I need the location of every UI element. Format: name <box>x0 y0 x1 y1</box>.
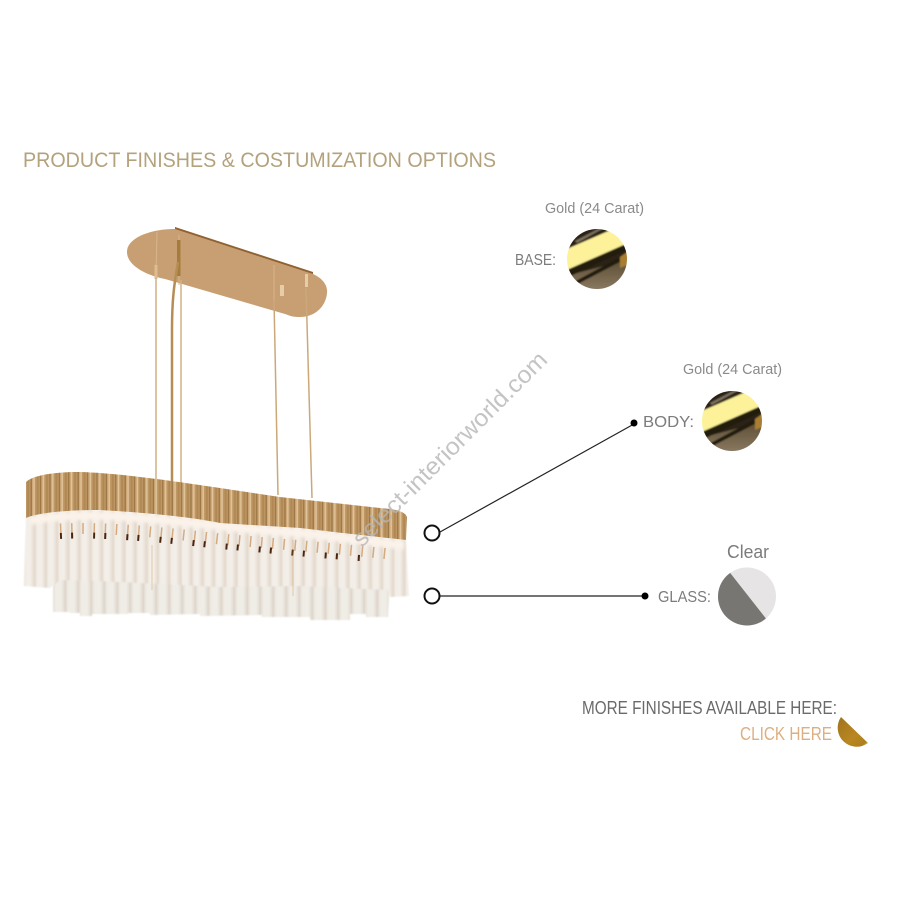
ceiling plate <box>127 227 327 317</box>
body finish name: Gold (24 Carat) <box>683 361 782 378</box>
glass label: GLASS: <box>658 589 711 606</box>
swatch: base gold <box>567 229 627 289</box>
watermark: select-interiorworld.com <box>347 346 553 552</box>
base label: BASE: <box>515 252 556 269</box>
icon: gold half circle <box>838 717 868 747</box>
metal body band <box>26 472 407 540</box>
marker: glass ring <box>424 588 440 604</box>
more finishes text: MORE FINISHES AVAILABLE HERE: <box>582 698 837 718</box>
swatch: body gold <box>702 391 762 451</box>
connector: body <box>440 420 638 532</box>
base finish name: Gold (24 Carat) <box>545 200 644 217</box>
body label: BODY: <box>643 414 694 431</box>
glass glow band and amber reflections <box>30 516 404 596</box>
upper glass tier <box>24 510 409 597</box>
click here link: CLICK HERE <box>740 724 832 744</box>
suspension cords <box>156 262 312 498</box>
lower glass tier <box>53 570 390 620</box>
swatch: clear glass <box>718 568 776 626</box>
chandelier <box>24 227 409 620</box>
connector: glass <box>440 592 648 600</box>
title: PRODUCT FINISHES & COSTUMIZATION OPTIONS <box>23 149 496 172</box>
marker: body ring <box>424 526 440 540</box>
glass finish name: Clear <box>727 542 769 562</box>
